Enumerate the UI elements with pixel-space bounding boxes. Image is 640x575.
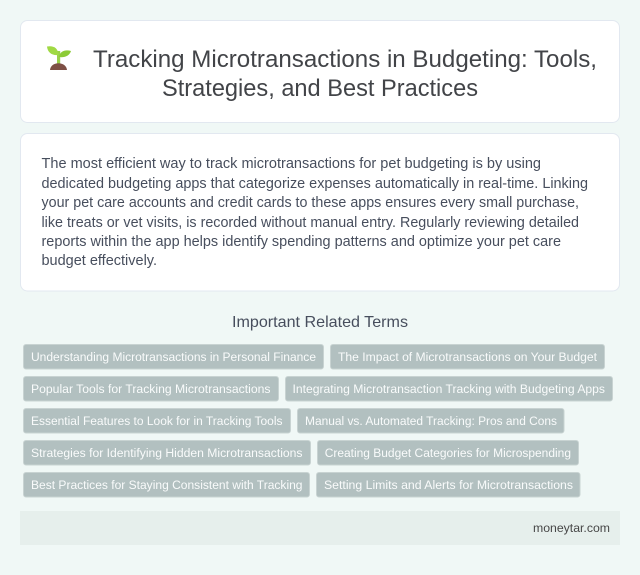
tag: Manual vs. Automated Tracking: Pros and Cons	[305, 414, 557, 428]
tag	[330, 344, 604, 369]
tag	[298, 408, 564, 433]
tag	[24, 408, 290, 433]
text block: description: dedicated budgeting apps that categorize expenses automatically in real-time. Linking	[42, 175, 588, 192]
tag: Essential Features to Look for in Tracking Tools	[31, 414, 282, 428]
title: Strategies, and Best Practices	[162, 75, 478, 102]
tag	[24, 344, 324, 369]
tag: Popular Tools for Tracking Microtransactions	[31, 382, 270, 396]
tag	[316, 472, 580, 497]
tag: Setting Limits and Alerts for Microtransactions	[324, 478, 573, 492]
tag: Integrating Microtransaction Tracking with Budgeting Apps	[292, 382, 605, 396]
tag	[286, 376, 612, 401]
tag: The Impact of Microtransactions on Your Budget	[338, 350, 598, 364]
title	[93, 46, 597, 102]
heading: related terms: Important Related Terms	[232, 314, 408, 331]
text block: description	[42, 155, 588, 269]
tag: Strategies for Identifying Hidden Microtransactions	[31, 446, 302, 460]
tag	[318, 440, 578, 465]
footer: site name: moneytar.com	[533, 521, 610, 535]
tag: Best Practices for Staying Consistent with Tracking	[31, 478, 303, 492]
panel: related term tags	[24, 344, 612, 497]
text block: description: budget effectively.	[42, 252, 157, 269]
tag	[24, 472, 310, 497]
tag: Creating Budget Categories for Microspending	[325, 446, 571, 460]
tag: Understanding Microtransactions in Personal Finance	[31, 350, 316, 364]
footer	[20, 511, 620, 545]
tag	[24, 440, 310, 465]
text block: description: reports within the app helps identify spending patterns and optimize your pet care	[42, 233, 561, 250]
title: Tracking Microtransactions in Budgeting: Tools,	[93, 46, 597, 73]
panel: title card	[20, 20, 620, 122]
text block: description: your pet care accounts and credit cards to these apps ensures every small purchase,	[42, 194, 579, 211]
text block: description: like treats or vet visits, is recorded without manual entry. Regularly reviewing detailed	[42, 214, 579, 231]
text block: description: The most efficient way to track microtransactions for pet budgeting is by using	[42, 155, 541, 172]
tag	[24, 376, 278, 401]
panel: description	[20, 134, 620, 291]
icon: seedling	[47, 46, 71, 70]
